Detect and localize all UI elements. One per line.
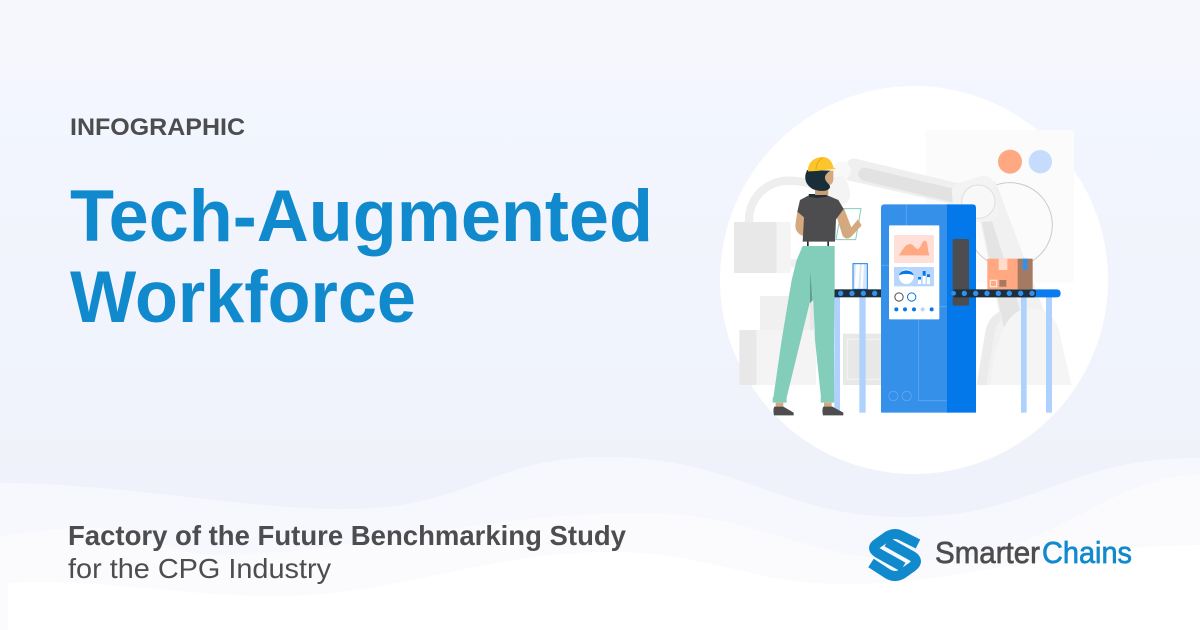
robot arm	[830, 159, 1072, 385]
wave: back layer	[0, 457, 1200, 630]
conveyor table legs	[834, 297, 1052, 413]
logo: SmarterChains	[871, 534, 1132, 576]
illustration: worker at factory machine	[720, 86, 1108, 474]
cardboard box	[987, 259, 1033, 289]
arms	[795, 208, 862, 239]
logo wordmark: Chains	[1042, 535, 1132, 570]
joint	[952, 176, 998, 222]
clipboard	[836, 209, 861, 240]
pants fold	[810, 272, 813, 303]
icon: logo mark	[871, 534, 918, 576]
upper arm	[847, 159, 962, 206]
hair	[805, 170, 831, 191]
pie and bar chart	[894, 267, 934, 286]
machine body	[881, 204, 976, 413]
title: Tech-Augmented	[70, 176, 653, 257]
background panel with indicator lights	[926, 130, 1074, 283]
straps	[807, 241, 829, 246]
neck and face	[815, 188, 828, 195]
title	[70, 176, 653, 338]
conveyor right	[951, 289, 1061, 297]
shoes	[773, 407, 843, 415]
wave: middle layer	[0, 475, 1200, 630]
hard hat	[808, 157, 836, 171]
white circle backdrop	[720, 86, 1108, 474]
conveyor left	[834, 289, 882, 297]
subtitle	[68, 520, 627, 584]
lower arm	[980, 180, 1045, 340]
wave: front layer	[8, 545, 1200, 630]
worker	[773, 157, 862, 415]
legs	[773, 246, 835, 398]
area chart	[894, 235, 934, 263]
title: Workforce	[70, 257, 416, 338]
product: glass item	[853, 264, 867, 289]
screen indicator dots	[894, 307, 934, 311]
label: infographic: INFOGRAPHIC	[70, 114, 245, 141]
background top band	[0, 0, 1200, 79]
logo wordmark: Smarter	[935, 535, 1040, 570]
subtitle: for the CPG Industry	[68, 553, 331, 584]
background boxes and arch	[734, 181, 884, 385]
screen dials	[895, 293, 916, 301]
base	[977, 312, 1007, 385]
cuffs	[773, 397, 834, 403]
subtitle: Factory of the Future Benchmarking Study	[68, 520, 627, 551]
machine screen	[889, 225, 939, 319]
ankles	[776, 403, 832, 407]
shirt	[797, 195, 844, 242]
machine dark door	[953, 239, 969, 306]
